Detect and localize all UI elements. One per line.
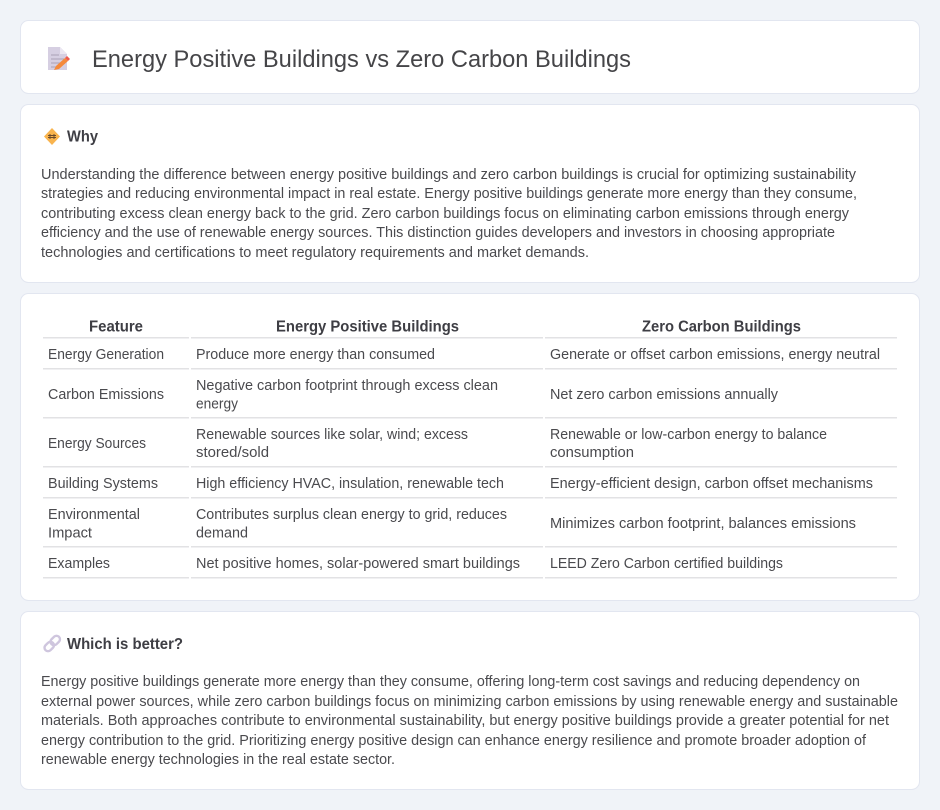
table row: environmental impact: Environmental [48, 507, 140, 523]
table row: energy sources: Renewable or low-carbon energy to balance [550, 427, 827, 443]
icon: orange diamond [44, 128, 60, 145]
table row: examples: LEED Zero Carbon certified buildings [550, 556, 783, 572]
table row: environmental impact [48, 507, 856, 542]
table row: building systems: Building Systems [48, 476, 158, 492]
panel: why [20, 104, 920, 282]
table row: energy sources: consumption [550, 445, 634, 461]
table row: energy generation: Produce more energy than consumed [196, 347, 435, 363]
panel: title header [20, 20, 920, 94]
panel: comparison table [20, 294, 920, 600]
heading: which is better: Which is better? [67, 636, 183, 653]
table row: environmental impact: demand [196, 526, 248, 542]
table header row: Energy Positive Buildings [276, 318, 459, 336]
table row: carbon emissions: Carbon Emissions [48, 387, 164, 403]
panel: which is better [20, 612, 920, 790]
table row: energy generation: Energy Generation [48, 347, 164, 363]
table row: carbon emissions: Net zero carbon emissions annually [550, 387, 779, 403]
table header row: Feature [89, 318, 143, 336]
table row: energy generation: Generate or offset carbon emissions, energy neutral [550, 347, 880, 363]
title: Energy Positive Buildings vs Zero Carbon Buildings [92, 46, 631, 73]
table row: building systems [48, 476, 873, 492]
text block: which is better paragraph: materials. Both approaches contribute to environmental sustainability, but energy positive buildings provide a greater potential for net [41, 713, 889, 729]
text block: why paragraph [41, 167, 857, 261]
heading: why: Why [67, 128, 98, 146]
text block: why paragraph: efficiency and the use of renewable energy sources. This distinction guides developers and investors in choosing appropriate [41, 225, 835, 241]
text block: why paragraph: Understanding the difference between energy positive buildings and zero carbon buildings is crucial for optimizing sustainability [41, 167, 857, 183]
table row: energy sources: Renewable sources like solar, wind; excess [196, 427, 468, 443]
table row: energy sources: stored/sold [196, 445, 269, 461]
text block: which is better paragraph [41, 674, 898, 768]
table row: energy sources [48, 427, 827, 461]
text block: why paragraph: technologies and certifications to meet regulatory requirements and market demands. [41, 245, 589, 261]
table row: examples: Examples [48, 556, 110, 572]
table row: environmental impact: Impact [48, 526, 92, 542]
table header row: Zero Carbon Buildings [642, 318, 801, 336]
table row: energy sources: Energy Sources [48, 436, 146, 452]
table row: carbon emissions: Negative carbon footprint through excess clean [196, 378, 498, 394]
icon: chain link [43, 634, 61, 653]
table row: carbon emissions [48, 378, 779, 412]
text block: which is better paragraph: energy contribution to the grid. Prioritizing energy positive design can enhance energy resilience and promote broader adoption of [41, 733, 867, 749]
table row: environmental impact: Minimizes carbon footprint, balances emissions [550, 516, 856, 532]
text block: why paragraph: strategies and reducing environmental impact in real estate. Energy positive buildings generate more energy than they consume, [41, 186, 857, 202]
table row: environmental impact: Contributes surplus clean energy to grid, reduces [196, 507, 507, 523]
table row: carbon emissions: energy [196, 396, 239, 412]
table header row [89, 318, 801, 336]
text block: which is better paragraph: Energy positive buildings generate more energy than they consume, offering long-term cost savings and reducing dependency on [41, 674, 860, 690]
table row: energy generation [48, 347, 880, 363]
table row: examples: Net positive homes, solar-powered smart buildings [196, 556, 520, 572]
table row: building systems: Energy-efficient design, carbon offset mechanisms [550, 476, 873, 492]
table row: building systems: High efficiency HVAC, insulation, renewable tech [196, 476, 504, 492]
text block: which is better paragraph: renewable energy technologies in the real estate sector. [41, 752, 395, 768]
table row: examples [48, 556, 783, 572]
icon: document with pencil [48, 47, 70, 70]
text block: which is better paragraph: external power sources, while zero carbon buildings focus on minimizing carbon emissions by using renewable energy and sustainable [41, 694, 898, 710]
text block: why paragraph: contributing excess clean energy back to the grid. Zero carbon buildings focus on eliminating carbon emissions through energy [41, 206, 850, 222]
